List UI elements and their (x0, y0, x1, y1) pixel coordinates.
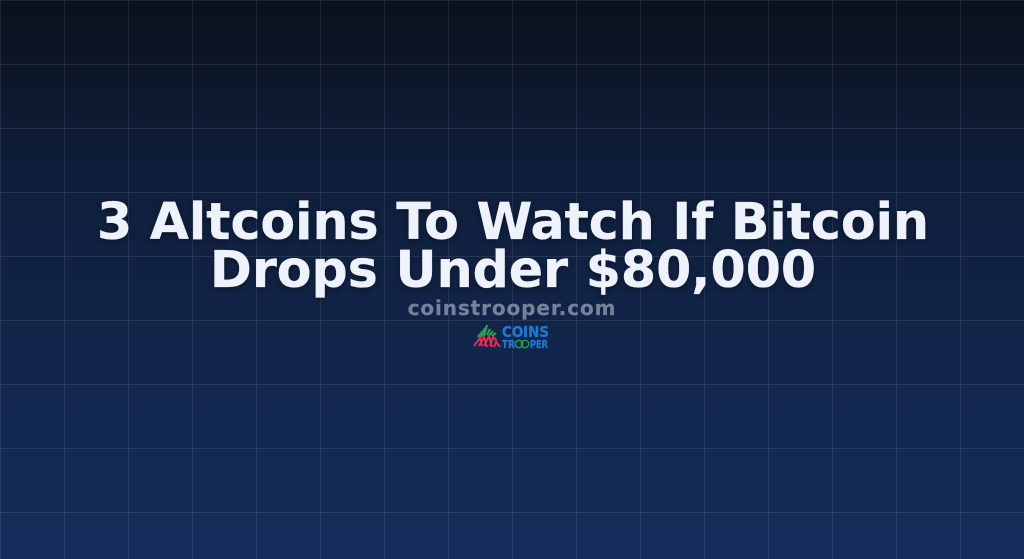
logo: Coins Trooper (473, 323, 549, 350)
title: 3 Altcoins To Watch If Bitcoin (97, 192, 929, 251)
title (97, 192, 929, 302)
logo wordmark: double-O binoculars (515, 340, 529, 348)
website label: coinstrooper.com (408, 296, 616, 320)
title: Drops Under $80,000 (210, 240, 816, 299)
logo icon: green peaks and red bars (474, 325, 500, 347)
